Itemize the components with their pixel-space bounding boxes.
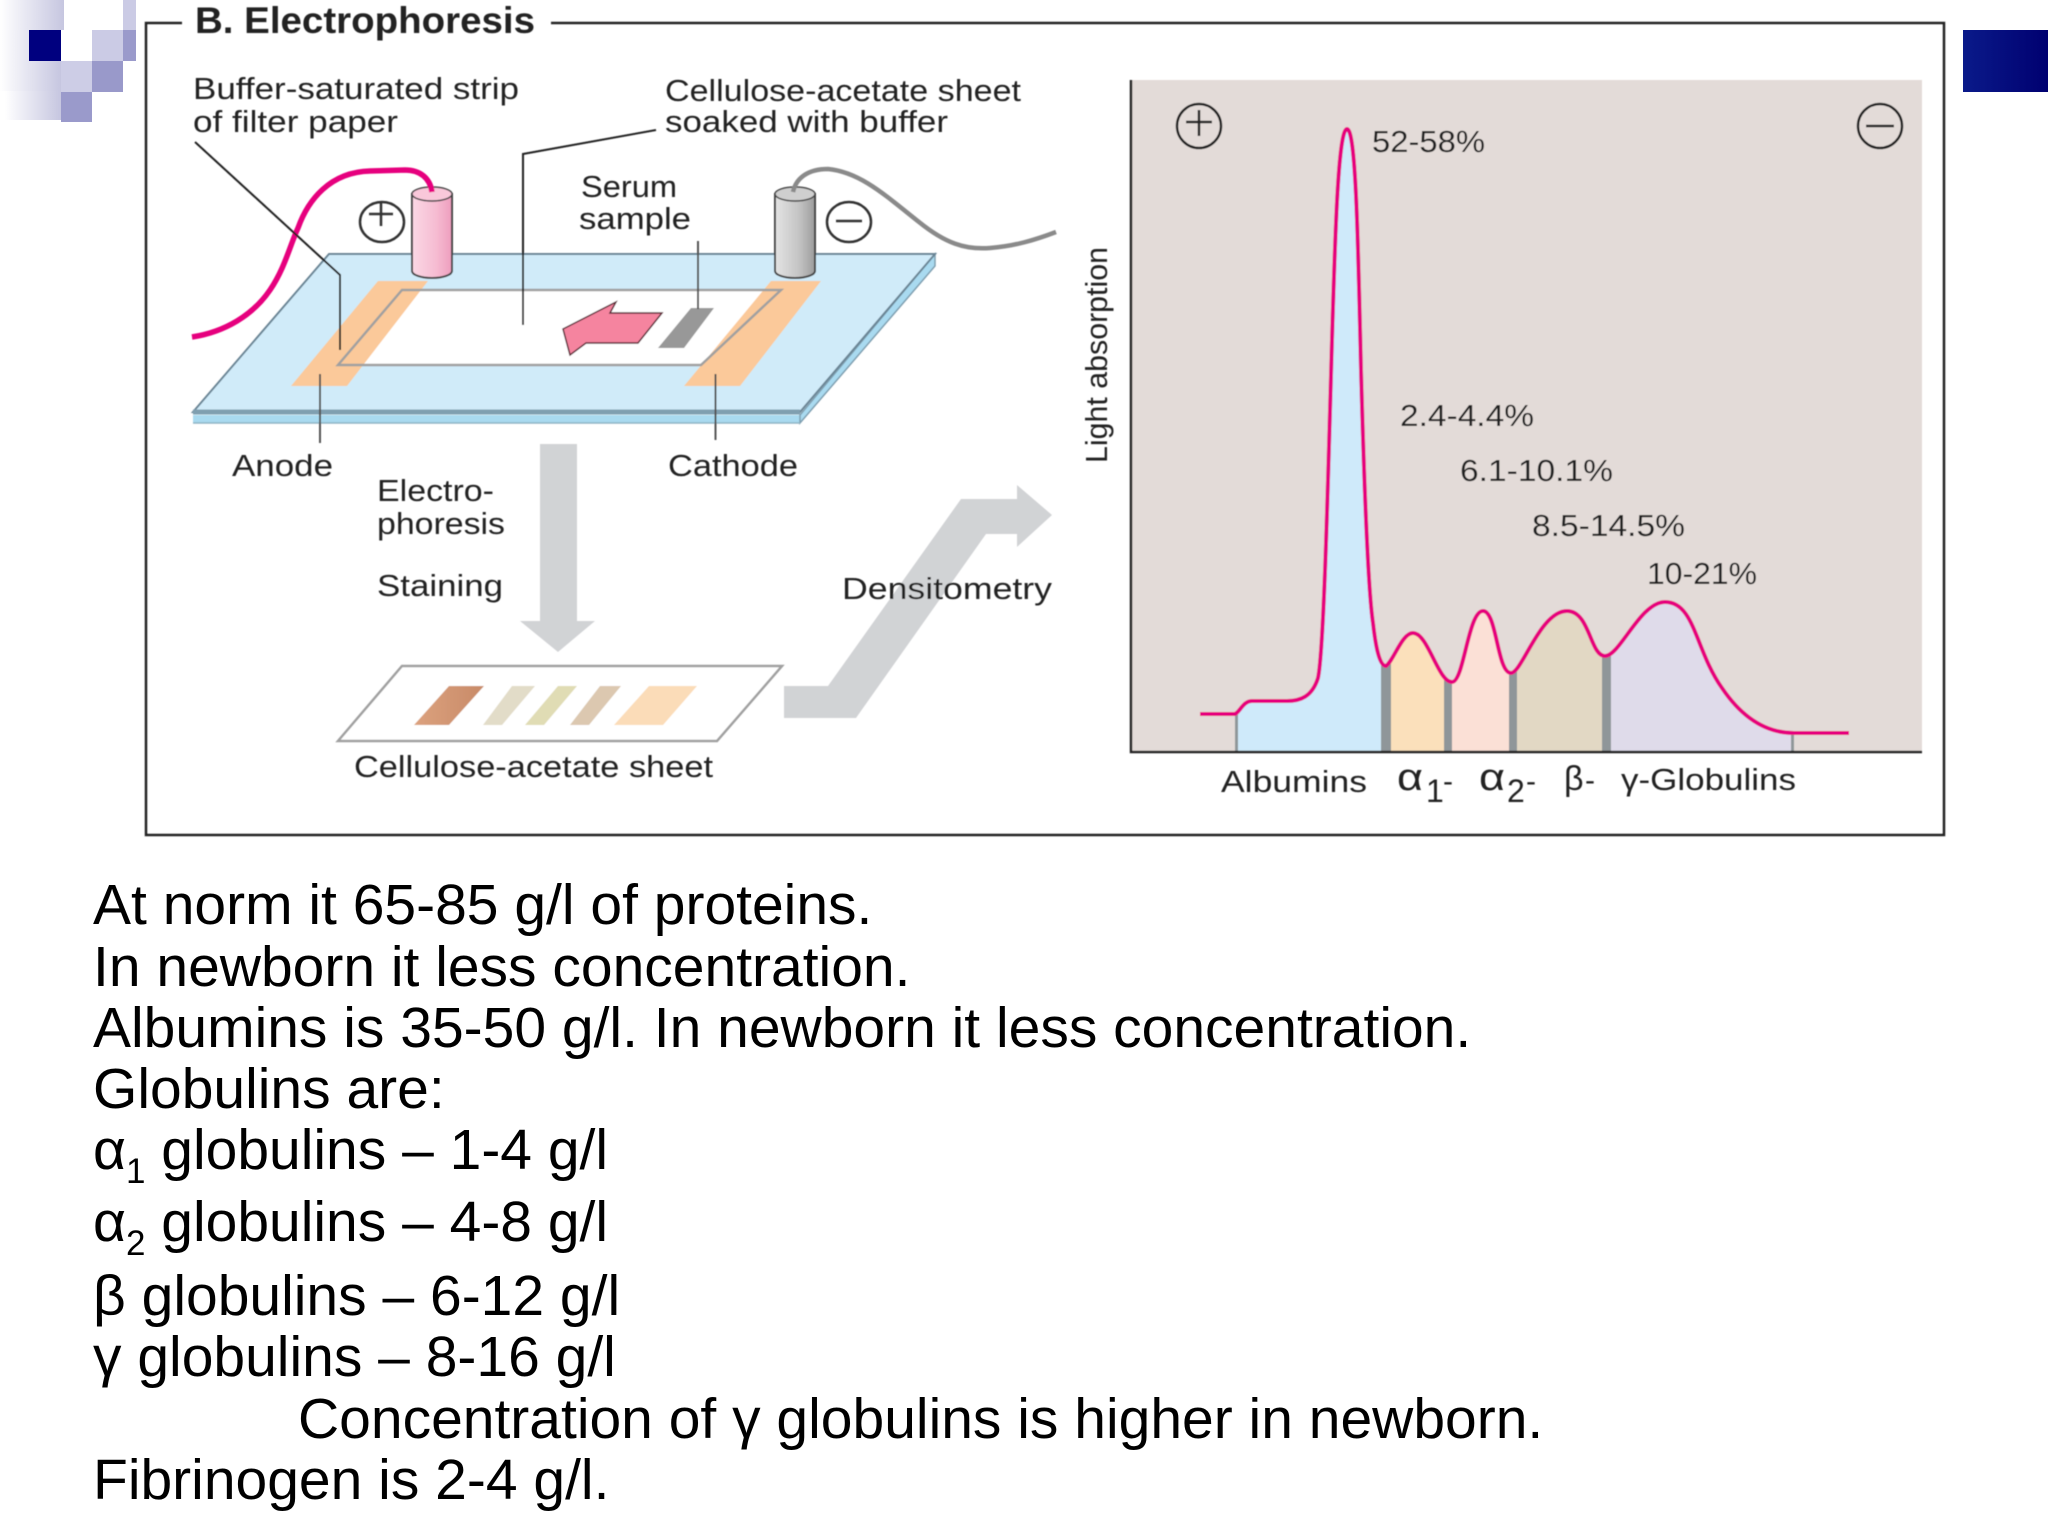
cathode filter strip	[684, 281, 821, 386]
x label: alpha 1: α	[1397, 757, 1423, 799]
label: buffer strip: Buffer-saturated strip	[193, 71, 519, 106]
text block: protein concentrations: Concentration of γ globulins is higher in newborn.	[298, 1387, 1543, 1451]
leader lines	[195, 130, 716, 443]
arrow: electrophoresis and staining	[520, 444, 595, 652]
icon: minus	[827, 202, 871, 242]
x label: gamma globulins: γ-Globulins	[1621, 762, 1796, 797]
label: serum sample: Serum	[581, 169, 677, 204]
label: buffer strip: of filter paper	[193, 104, 398, 139]
x label: alpha 2: 2	[1507, 773, 1525, 809]
label: cellulose-acetate sheet soaked: soaked with buffer	[665, 104, 948, 139]
sheet outline	[338, 290, 781, 365]
chart background	[1131, 80, 1922, 752]
label: serum sample: sample	[579, 201, 691, 236]
text block: protein concentrations	[93, 873, 1543, 1512]
text block: protein concentrations: In newborn it less concentration.	[93, 935, 910, 999]
anode filter strip	[291, 281, 428, 386]
text block: protein concentrations: α	[93, 1118, 126, 1182]
text block: protein concentrations: Fibrinogen is 2-4 g/l.	[93, 1448, 609, 1512]
cathode electrode cylinder	[775, 187, 815, 278]
x label: alpha 2: α	[1479, 757, 1505, 799]
anode electrode cylinder	[412, 187, 452, 278]
diagram: stained cellulose-acetate sheet	[338, 666, 782, 741]
label: cellulose-acetate sheet: Cellulose-acetate sheet	[354, 749, 713, 784]
text block: protein concentrations: globulins – 4-8 g/l	[145, 1190, 608, 1254]
label: staining step: Staining	[377, 568, 503, 603]
decoration: top-right navy block	[1963, 30, 2048, 92]
label: cellulose-acetate sheet soaked: Cellulose-acetate sheet	[665, 73, 1021, 108]
value: alpha 2: 6.1-10.1%	[1460, 453, 1613, 488]
value: albumins: 52-58%	[1372, 124, 1485, 159]
x label: beta: -	[1585, 764, 1595, 797]
label: anode: Anode	[232, 448, 333, 483]
text block: protein concentrations: Albumins is 35-50 g/l. In newborn it less concentration.	[93, 996, 1471, 1060]
panel: electrophoresis figure frame	[146, 23, 1944, 835]
diagram: electrophoresis apparatus	[192, 71, 1056, 483]
label: electrophoresis step: Electro-	[377, 473, 494, 508]
x label: alpha 1: -	[1443, 765, 1453, 798]
decoration: top-left checker squares	[0, 0, 136, 122]
fractions under curve	[1235, 100, 1794, 752]
label: electrophoresis step: phoresis	[377, 506, 505, 541]
serum sample band	[658, 308, 714, 348]
cellulose-acetate sheet on plate	[338, 290, 781, 365]
text block: protein concentrations: γ globulins – 8-16 g/l	[93, 1325, 616, 1389]
text block: protein concentrations: 2	[126, 1224, 145, 1263]
icon: minus	[1858, 104, 1902, 148]
value: beta: 8.5-14.5%	[1532, 508, 1685, 543]
value: gamma: 10-21%	[1647, 556, 1757, 591]
y axis label: Light absorption	[1079, 247, 1114, 463]
gray electrode wire	[793, 169, 1056, 248]
chart: densitometry curve	[1079, 80, 1922, 809]
pink electrode wire	[192, 170, 432, 337]
icon: plus	[1177, 104, 1221, 148]
x label: albumins: Albumins	[1221, 764, 1367, 799]
plate	[193, 254, 935, 423]
text block: protein concentrations: β globulins – 6-12 g/l	[93, 1264, 620, 1328]
label: densitometry: Densitometry	[842, 571, 1053, 606]
migration arrow	[563, 302, 662, 355]
label: cathode: Cathode	[668, 448, 798, 483]
x label: beta: β	[1564, 760, 1584, 798]
text block: protein concentrations: At norm it 65-85 g/l of proteins.	[93, 873, 872, 937]
text block: protein concentrations: Globulins are:	[93, 1057, 445, 1121]
icon: plus	[360, 202, 404, 242]
heading: B. Electrophoresis: B. Electrophoresis	[195, 0, 535, 41]
text block: protein concentrations: 1	[126, 1152, 145, 1191]
text block: protein concentrations: α	[93, 1190, 126, 1254]
value: alpha 1: 2.4-4.4%	[1400, 398, 1534, 433]
axes	[1131, 80, 1922, 752]
x label: alpha 2: -	[1526, 765, 1536, 798]
arrow: densitometry	[784, 485, 1052, 718]
text block: protein concentrations: globulins – 1-4 g/l	[145, 1118, 608, 1182]
x label: alpha 1: 1	[1426, 773, 1444, 809]
absorption curve	[1200, 129, 1849, 733]
figure: electrophoresis illustration	[146, 0, 1944, 835]
